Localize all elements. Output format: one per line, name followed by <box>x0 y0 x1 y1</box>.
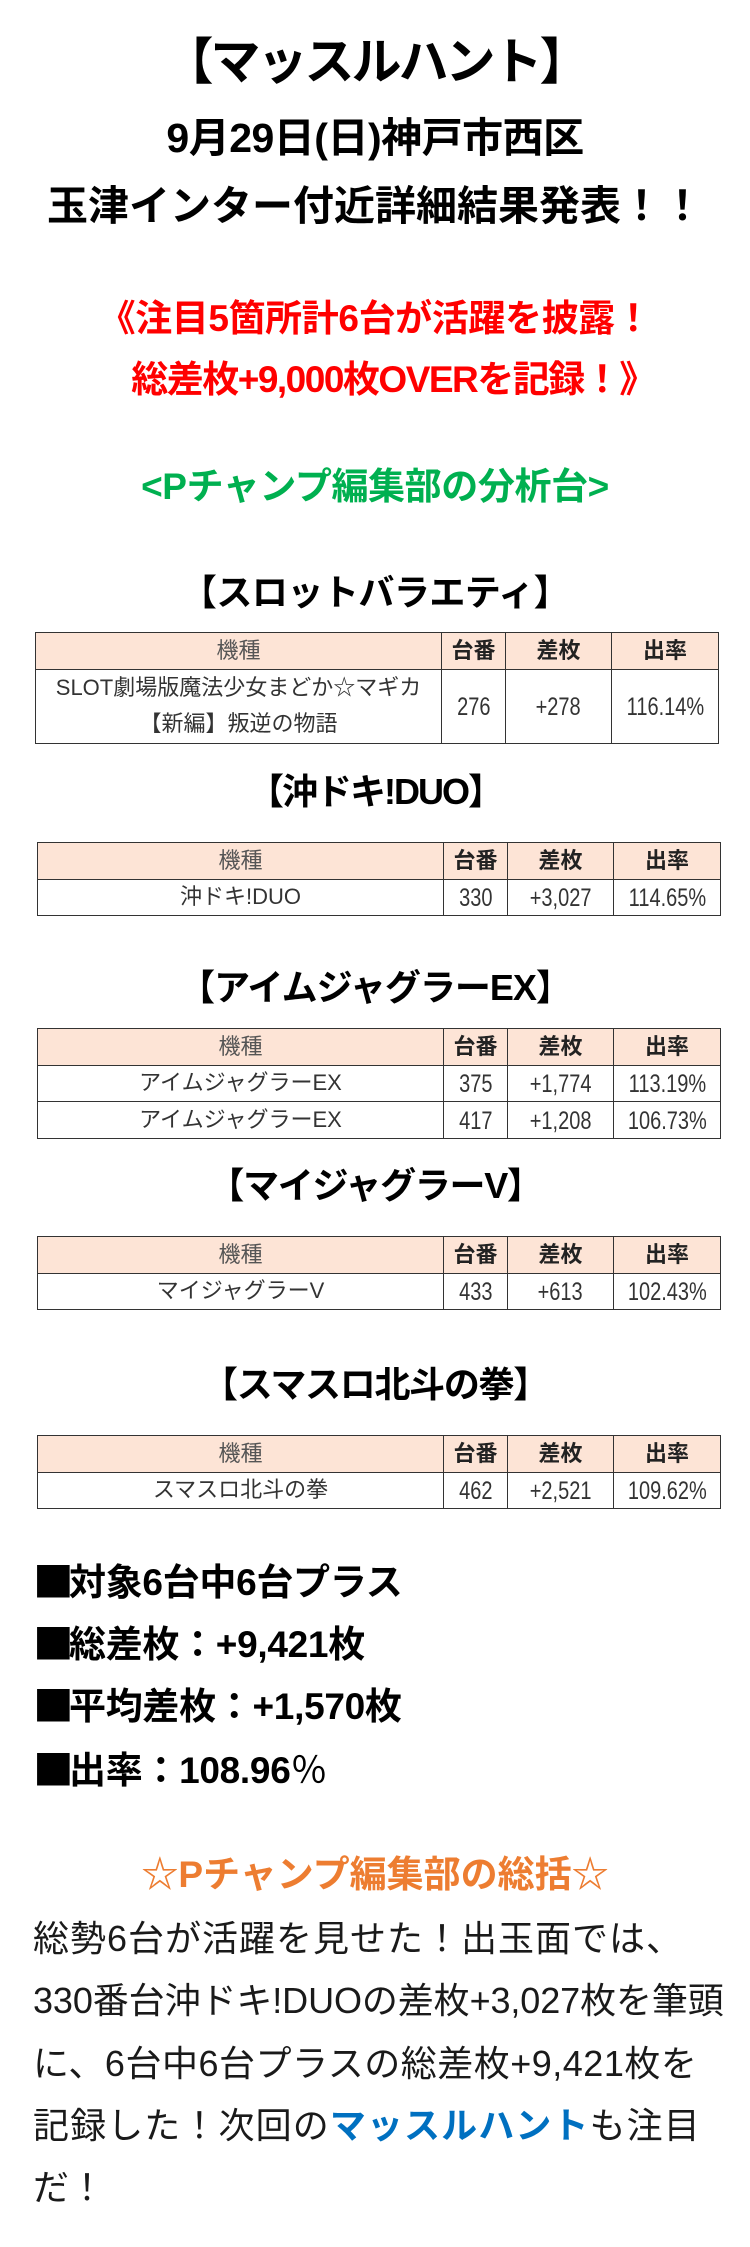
table: slot variety <box>35 632 719 744</box>
table: I'm Juggler EX: 台番 <box>453 1034 498 1059</box>
table: My Juggler V: 102.43% <box>628 1278 706 1306</box>
summary stat: machines in plus: ■ <box>33 1549 73 1609</box>
table: I'm Juggler EX: 出率 <box>645 1034 689 1059</box>
table: slot variety: 台番 <box>451 638 496 663</box>
summary stat: average difference <box>33 1673 402 1733</box>
table: oki doki duo: 台番 <box>453 848 498 873</box>
table: oki doki duo: 差枚 <box>538 848 582 873</box>
table: My Juggler V: 台番 <box>453 1242 498 1267</box>
table: slot variety: SLOT劇場版魔法少女まどか☆マギカ <box>56 675 421 700</box>
summary stat: machines in plus <box>33 1549 402 1609</box>
red highlight text <box>99 298 655 400</box>
table: Smart Slot Hokuto no Ken: スマスロ北斗の拳 <box>153 1477 328 1502</box>
orange summary heading: ☆Pチャンプ編集部の総括☆ <box>141 1854 609 1895</box>
table: I'm Juggler EX: 375 <box>459 1070 492 1098</box>
table: I'm Juggler EX: 113.19% <box>628 1070 706 1098</box>
table: I'm Juggler EX <box>37 1028 721 1138</box>
summary paragraph: 総勢6台が活躍を見せた！出玉面では、 <box>33 1918 683 1959</box>
table: I'm Juggler EX: +1,774 <box>530 1070 591 1098</box>
heading: slot variety: 【スロットバラエティ】 <box>181 572 569 613</box>
table: slot variety: 出率 <box>643 638 687 663</box>
heading: My Juggler V: 【マイジャグラーV】 <box>208 1165 542 1206</box>
table: My Juggler V: 433 <box>459 1278 492 1306</box>
heading: I'm Juggler EX: 【アイムジャグラーEX】 <box>179 967 571 1008</box>
summary paragraph: だ！ <box>33 2167 105 2208</box>
table: I'm Juggler EX: 417 <box>459 1107 492 1135</box>
table: oki doki duo: 機種 <box>218 848 262 873</box>
table: oki doki duo: +3,027 <box>530 884 591 912</box>
table: I'm Juggler EX: アイムジャグラーEX <box>139 1070 342 1095</box>
table: My Juggler V <box>37 1236 721 1310</box>
table: Smart Slot Hokuto no Ken: 462 <box>459 1477 492 1505</box>
table: slot variety: 116.14% <box>626 693 704 721</box>
table: I'm Juggler EX: アイムジャグラーEX <box>139 1107 342 1132</box>
table: I'm Juggler EX: 差枚 <box>538 1034 582 1059</box>
table: oki doki duo: 出率 <box>645 848 689 873</box>
table: Smart Slot Hokuto no Ken <box>37 1435 721 1509</box>
table: My Juggler V: 出率 <box>645 1242 689 1267</box>
summary paragraph <box>33 1918 724 2208</box>
table: slot variety: 276 <box>457 693 490 721</box>
table: slot variety: 機種 <box>216 638 260 663</box>
table: My Juggler V: +613 <box>538 1278 583 1306</box>
table: oki doki duo: 沖ドキ!DUO <box>180 884 301 909</box>
summary stat: payout rate: 出率：108.96％ <box>69 1740 327 1794</box>
table: Smart Slot Hokuto no Ken: 差枚 <box>538 1441 582 1466</box>
table: My Juggler V: 機種 <box>218 1242 262 1267</box>
summary stat: total difference: ■ <box>33 1611 73 1671</box>
table: I'm Juggler EX: 機種 <box>218 1034 262 1059</box>
summary stat: average difference: ■ <box>33 1673 73 1733</box>
summary stat: average difference: 平均差枚：+1,570枚 <box>69 1686 402 1727</box>
summary stat: total difference: 総差枚：+9,421枚 <box>69 1624 365 1665</box>
summary stat: payout rate: ■ <box>33 1737 73 1797</box>
table: Smart Slot Hokuto no Ken: 台番 <box>453 1441 498 1466</box>
red highlight text: 総差枚+9,000枚OVERを記録！》 <box>131 359 655 400</box>
table: slot variety: 【新編】叛逆の物語 <box>139 711 338 736</box>
title: 【マッスルハント】 <box>164 34 586 90</box>
subtitle: results announcement: 玉津インター付近詳細結果発表！！ <box>47 183 703 229</box>
table: I'm Juggler EX: 106.73% <box>628 1107 706 1135</box>
heading: Smart Slot Hokuto no Ken: 【スマスロ北斗の拳】 <box>202 1364 548 1405</box>
table: Smart Slot Hokuto no Ken: 出率 <box>645 1441 689 1466</box>
table: My Juggler V: 差枚 <box>538 1242 582 1267</box>
summary paragraph: 330番台沖ドキ!DUOの差枚+3,027枚を筆頭 <box>33 1980 724 2021</box>
heading: oki doki duo: 【沖ドキ!DUO】 <box>248 771 502 812</box>
red highlight text: 《注目5箇所計6台が活躍を披露！ <box>99 298 651 339</box>
table: My Juggler V: マイジャグラーV <box>157 1278 324 1303</box>
table: slot variety: 差枚 <box>536 638 580 663</box>
subtitle: date and area: 9月29日(日)神戸市西区 <box>166 115 584 161</box>
summary stat: machines in plus: 対象6台中6台プラス <box>69 1562 402 1603</box>
summary paragraph: 記録した！次回のマッスルハントも注目 <box>33 2105 701 2146</box>
summary paragraph: に、6台中6台プラスの総差枚+9,421枚を <box>33 2043 697 2084</box>
table: oki doki duo <box>37 842 721 916</box>
table: slot variety: +278 <box>536 693 581 721</box>
table: Smart Slot Hokuto no Ken: +2,521 <box>530 1477 591 1505</box>
table: I'm Juggler EX: +1,208 <box>530 1107 591 1135</box>
table: Smart Slot Hokuto no Ken: 109.62% <box>628 1477 706 1505</box>
table: oki doki duo: 330 <box>459 884 492 912</box>
summary stat: total difference <box>33 1611 365 1671</box>
table: Smart Slot Hokuto no Ken: 機種 <box>218 1441 262 1466</box>
green section heading: <Pチャンプ編集部の分析台> <box>141 466 609 507</box>
table: oki doki duo: 114.65% <box>628 884 706 912</box>
